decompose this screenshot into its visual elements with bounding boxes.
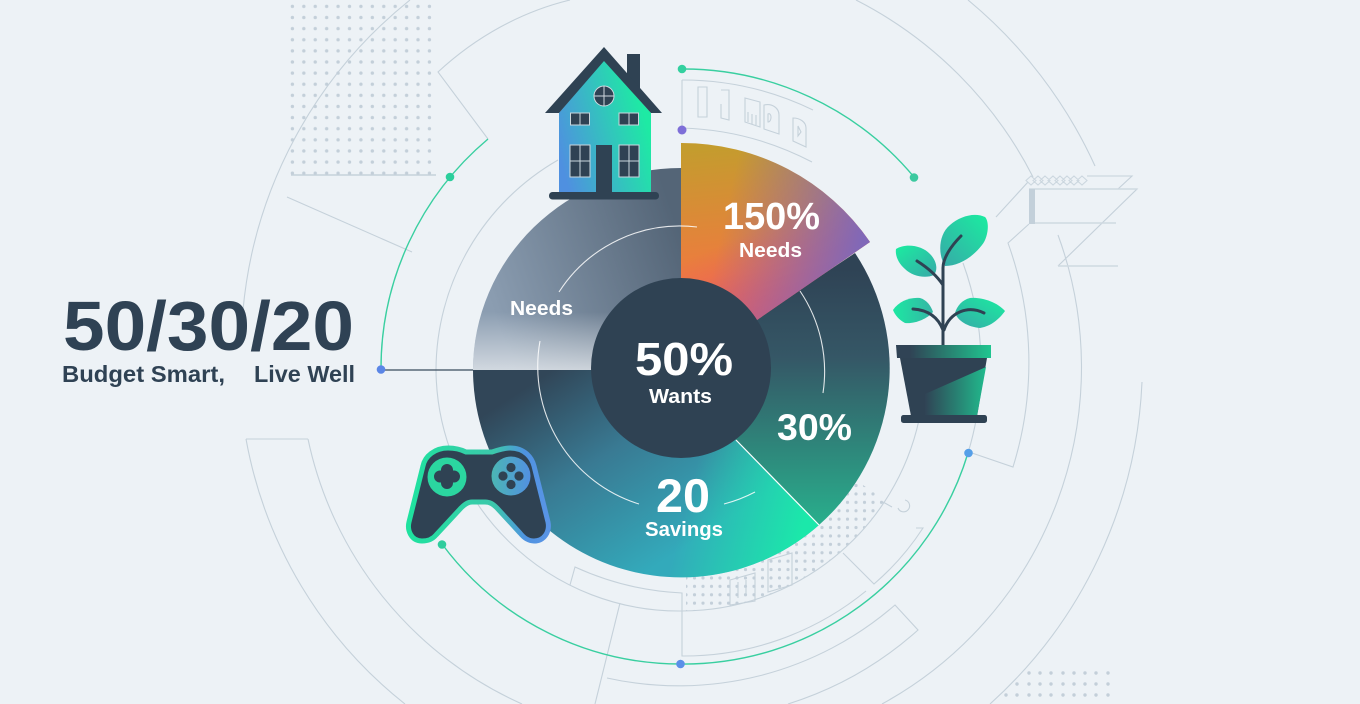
windows: [570, 113, 639, 177]
inner white arcs: [538, 226, 825, 504]
label: Needs left: Needs: [510, 297, 573, 320]
chimney: [627, 54, 640, 92]
green connector arcs with nodes: [377, 65, 973, 668]
subtitle part two: Live Well: [254, 361, 355, 387]
node: left blue: [377, 365, 385, 374]
label: 30%: 30%: [777, 407, 852, 448]
house body: [559, 60, 651, 192]
icon: house: [545, 47, 662, 200]
pot saucer: [901, 415, 987, 423]
node: top green: [678, 65, 686, 73]
background technical line work: [243, 0, 1142, 704]
icon: potted plant: [893, 215, 1005, 423]
label: 50%: 50%: [635, 333, 733, 385]
round attic window: [594, 86, 614, 106]
pot rim: [896, 345, 991, 358]
door: [596, 145, 612, 193]
centre circle: [591, 278, 771, 458]
upper left leaf: [896, 246, 936, 277]
decorative chain and bar, top right: [1026, 176, 1087, 224]
icon: game controller: [409, 448, 548, 541]
leader line to chart: [381, 369, 474, 371]
arc: bottom connector: [442, 453, 968, 664]
node: top purple: [678, 126, 686, 134]
arc: left connector: [381, 139, 488, 369]
label: 20: 20: [656, 469, 710, 522]
arc: top connector: [681, 69, 914, 177]
dot grid bottom centre: [686, 484, 883, 610]
pot highlight: [925, 367, 986, 416]
sector: savings: [473, 370, 819, 577]
top leaf: [940, 215, 988, 266]
donut chart: [473, 143, 890, 577]
controller body: [409, 448, 548, 541]
label: Savings: Savings: [645, 518, 723, 541]
node: left green: [446, 173, 454, 181]
node: top right green: [910, 173, 918, 182]
dot grid top left: [289, 3, 437, 174]
d-pad button: [428, 458, 466, 496]
sector: 30 percent: [681, 253, 890, 525]
stem and branches: [913, 236, 984, 346]
label: 150%: 150%: [723, 196, 820, 238]
node: bottom blue: [676, 660, 685, 668]
sector: highlighted 150 percent needs: [681, 143, 870, 372]
lower right leaf: [955, 298, 1005, 328]
sector: grey needs: [473, 168, 681, 370]
base: [549, 192, 659, 200]
subtitle part one: Budget Smart,: [62, 361, 225, 387]
node: bottom left green: [438, 540, 446, 549]
title: 50/30/20: [63, 287, 354, 365]
pot body: [900, 358, 987, 416]
roof: [545, 47, 662, 113]
lower left leaf: [893, 298, 933, 323]
dot grid bottom right: [1004, 671, 1110, 697]
node: right blue: [964, 449, 973, 457]
chart labels: [510, 196, 852, 541]
action buttons: [492, 456, 530, 496]
label: Wants: Wants: [649, 385, 712, 408]
divider between savings and 30 percent: [736, 440, 819, 525]
label: Needs right: Needs: [739, 239, 802, 262]
